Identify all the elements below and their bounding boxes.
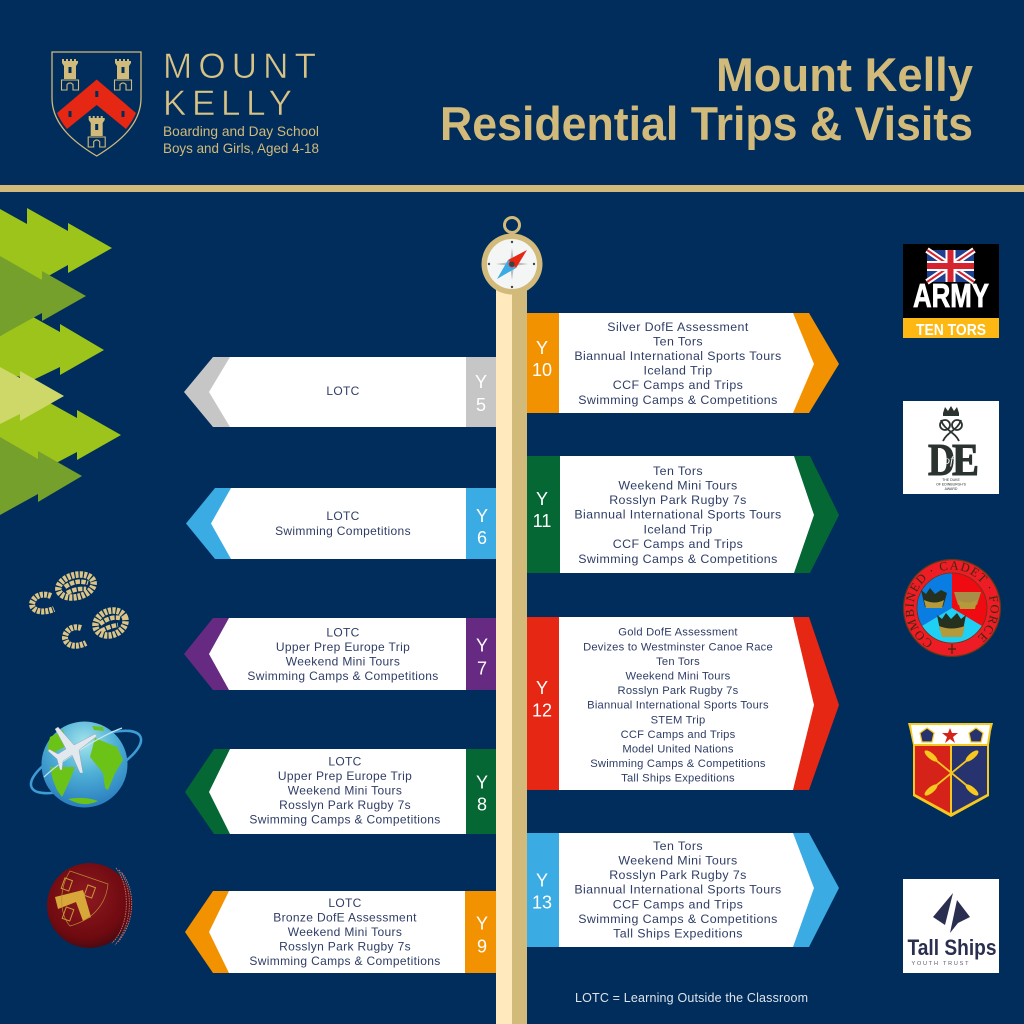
logo: Duke of Edinburgh's Award: AWARD [945,487,958,491]
sign: Year 8: Swimming Camps & Competitions [249,812,441,826]
sign: Year 10: Y [536,338,548,358]
sign: Year 12: Model United Nations [622,744,734,756]
sign: Year 13: Tall Ships Expeditions [613,926,743,940]
sign: Year 11: Ten Tors [653,464,703,478]
title: Residential Trips & Visits [440,97,973,150]
sign: Year 7: Upper Prep Europe Trip [276,640,410,654]
sign: Year 12: STEM Trip [651,714,705,726]
school name [163,47,316,123]
school name: MOUNT [163,47,316,86]
sign: Year 11: Weekend Mini Tours [618,478,738,492]
sign: Year 13: 13 [532,892,552,912]
sign: Year 6 [186,488,496,559]
school tagline [163,123,319,156]
sign: Year 13: Biannual International Sports Tours [574,882,782,896]
logo: Combined Cadet Force: COMBINED · CADET · FORCE [905,561,999,647]
logo: Duke of Edinburgh's Award: D [928,434,955,485]
sign: Year 11: Swimming Camps & Competitions [578,552,778,566]
logo: Duke of Edinburgh's Award: E [952,434,979,485]
sign: Year 8: Rosslyn Park Rugby 7s [279,798,411,812]
school tagline: Boarding and Day School [163,123,319,139]
sign: Year 12: Y [536,678,548,698]
sign: Year 7: 7 [477,658,487,678]
logo: Army Ten Tors [903,244,999,339]
sign: Year 9: Y [476,914,488,934]
sign: Year 6: Y [476,506,488,526]
sign: Year 12 [527,617,839,790]
sign: Year 10: Silver DofE Assessment [607,320,749,334]
sign: Year 12: Ten Tors [656,656,700,668]
sign: Year 10: Swimming Camps & Competitions [578,393,778,407]
icon: compass [482,218,542,294]
sign: Year 5: Y [475,372,487,392]
sign: Year 7 [184,618,496,690]
header logo [52,47,319,156]
signpost pole [496,280,527,1024]
sign: Year 10: Ten Tors [653,334,703,348]
sign: Year 12: Biannual International Sports Tours [587,700,769,712]
sign: Year 7: Swimming Camps & Competitions [247,669,439,683]
logo: Duke of Edinburgh's Award: THE DUKE [942,478,961,482]
sign: Year 8: Y [476,772,488,792]
icon: globe with plane [23,719,149,808]
sign: Year 8: 8 [477,794,487,814]
footnote: LOTC = Learning Outside the Classroom [575,991,808,1005]
sign: Year 7: Weekend Mini Tours [286,654,400,668]
sign: Year 6: LOTC [326,509,360,523]
sign: Year 12: Swimming Camps & Competitions [590,758,766,770]
logo: Tall Ships Youth Trust: Tall Ships [908,935,996,960]
logo: Army Ten Tors: ARMY [913,277,989,314]
sign: Year 9: Weekend Mini Tours [288,925,402,939]
logo: Duke of Edinburgh's Award [903,401,999,494]
sign: Year 11: Rosslyn Park Rugby 7s [609,493,747,507]
sign: Year 12: 12 [532,700,552,720]
sign: Year 8: Upper Prep Europe Trip [278,769,412,783]
sign: Year 9: Swimming Camps & Competitions [249,954,441,968]
sign: Year 9: 9 [477,936,487,956]
sign: Year 6: 6 [477,528,487,548]
sign: Year 13: Weekend Mini Tours [618,854,738,868]
icon: boot prints [32,571,129,646]
sign: Year 10: 10 [532,360,552,380]
sign: Year 11: CCF Camps and Trips [613,537,743,551]
sign: Year 9: LOTC [328,896,362,910]
sign: Year 13: Y [536,870,548,890]
sign: Year 6: Swimming Competitions [275,524,411,538]
sign: Year 5: LOTC [326,384,360,398]
logo: Army Ten Tors: TEN TORS [916,322,986,339]
sign: Year 5 [184,357,496,427]
sign: Year 10: CCF Camps and Trips [613,378,743,392]
sign: Year 12: Gold DofE Assessment [618,627,738,639]
sign: Year 5: 5 [476,395,486,415]
sign: Year 9: Rosslyn Park Rugby 7s [279,940,411,954]
sign: Year 13 [527,833,839,947]
sign: Year 12: Devizes to Westminster Canoe Race [583,641,773,653]
sign: Year 11: Biannual International Sports Tours [574,508,782,522]
sign: Year 8 [185,749,496,834]
sign: Year 13: Ten Tors [653,839,703,853]
sign: Year 13: Swimming Camps & Competitions [578,912,778,926]
school tagline: Boys and Girls, Aged 4-18 [163,140,319,156]
sign: Year 10: Iceland Trip [643,364,713,378]
logo: Tall Ships Youth Trust: YOUTH TRUST [912,961,969,967]
sign: Year 8: Weekend Mini Tours [288,784,402,798]
logo: Duke of Edinburgh's Award: OF EDINBURGH'S [936,482,967,486]
sign: Year 12: Weekend Mini Tours [626,670,731,682]
sign: Year 7: Y [476,636,488,656]
sign: Year 11: Iceland Trip [643,522,713,536]
school name: KELLY [163,84,292,123]
sign: Year 12: Tall Ships Expeditions [621,773,735,785]
sign: Year 13: CCF Camps and Trips [613,898,743,912]
sign: Year 12: CCF Camps and Trips [621,729,736,741]
sign: Year 7: LOTC [326,626,360,640]
sign: Year 10: Biannual International Sports Tours [574,349,782,363]
sign: Year 13: Rosslyn Park Rugby 7s [609,868,747,882]
sign: Year 11 [527,456,839,573]
logo: Duke of Edinburgh's Award: of [944,453,955,467]
sign: Year 9: Bronze DofE Assessment [273,910,417,924]
sign: Year 11: Y [536,489,548,509]
sign: Year 10 [527,313,839,413]
logo: crossed paddles shield [908,723,993,817]
sign: Year 11: 11 [533,511,551,531]
title [440,48,973,150]
icon: cricket ball [47,863,132,948]
icon: forest of trees [0,208,121,515]
sign: Year 12: Rosslyn Park Rugby 7s [618,685,739,697]
sign: Year 8: LOTC [328,754,362,768]
logo: Tall Ships Youth Trust [903,879,999,973]
sign: Year 9 [185,891,496,973]
title: Mount Kelly [716,48,973,101]
crest shield [52,52,141,156]
